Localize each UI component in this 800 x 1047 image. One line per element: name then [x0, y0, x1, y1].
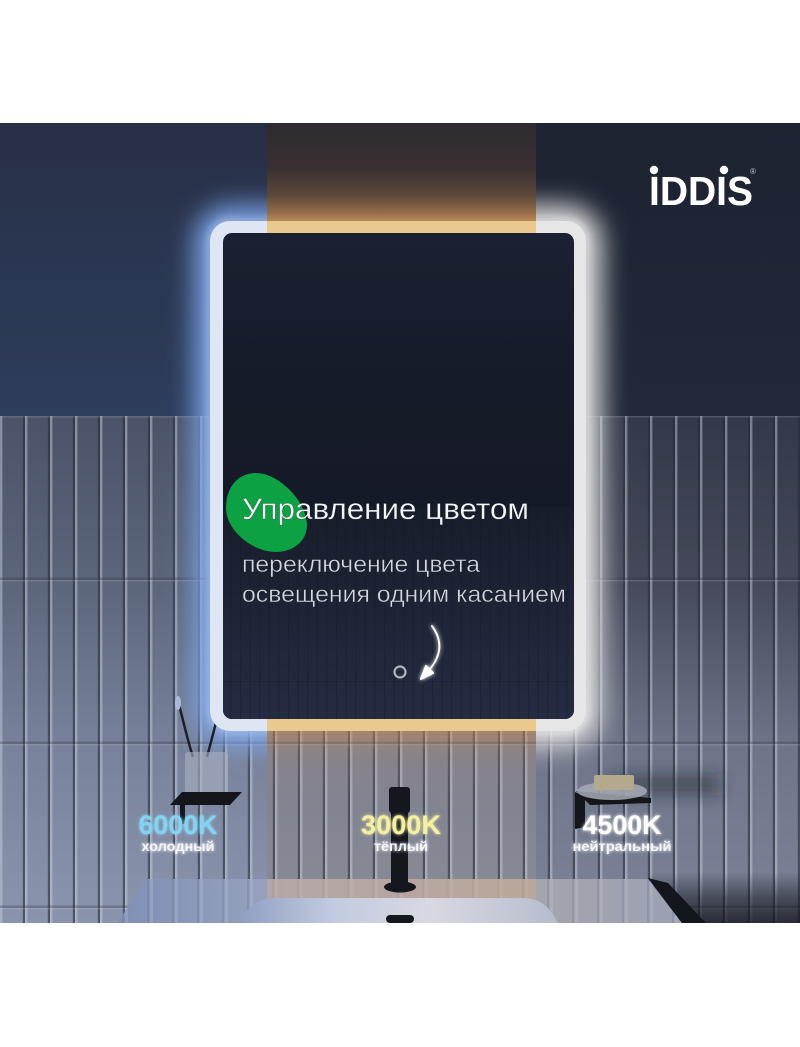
icon: touch sensor ring — [394, 666, 406, 678]
mirror glass — [223, 233, 574, 719]
mirror — [210, 221, 586, 731]
arrow to sensor — [421, 626, 439, 679]
label: 4500K neutral — [572, 810, 672, 854]
logo: IDDIS — [649, 168, 753, 214]
sink basin — [238, 898, 558, 923]
tiled wall — [0, 416, 800, 923]
icon: toothbrushes in glass on shelf — [170, 695, 242, 824]
heading: Управление цветом — [242, 493, 529, 526]
cool blue glow on the left — [175, 186, 267, 765]
subheading text: освещения одним касанием — [242, 581, 566, 607]
label: 4500K neutral: нейтральный — [572, 839, 672, 854]
label: 3000K warm: 3000K — [361, 810, 441, 840]
label: 6000K cold — [138, 810, 218, 854]
logo: ® — [750, 167, 756, 176]
label: 4500K neutral: 4500K — [582, 810, 662, 840]
shadow behind soap shelf — [610, 775, 720, 795]
label: 6000K cold: 6000K — [138, 810, 218, 840]
mirror frame — [210, 221, 586, 731]
label: 3000K warm: тёплый — [374, 839, 428, 854]
bathroom scene — [0, 123, 800, 923]
label: 6000K cold: холодный — [142, 839, 214, 854]
green blob accent — [226, 473, 307, 552]
subheading text — [243, 560, 564, 607]
upper dark wall — [0, 123, 800, 416]
warm glow below the mirror — [267, 731, 536, 794]
label: 3000K warm — [361, 810, 441, 854]
countertop — [117, 878, 706, 923]
neutral white glow on the right — [536, 184, 623, 766]
subheading text: переключение цвета — [242, 551, 480, 577]
icon: soap dish on shelf — [575, 775, 651, 829]
floor shadow at lower right — [650, 872, 800, 923]
icon: black faucet — [384, 787, 416, 892]
